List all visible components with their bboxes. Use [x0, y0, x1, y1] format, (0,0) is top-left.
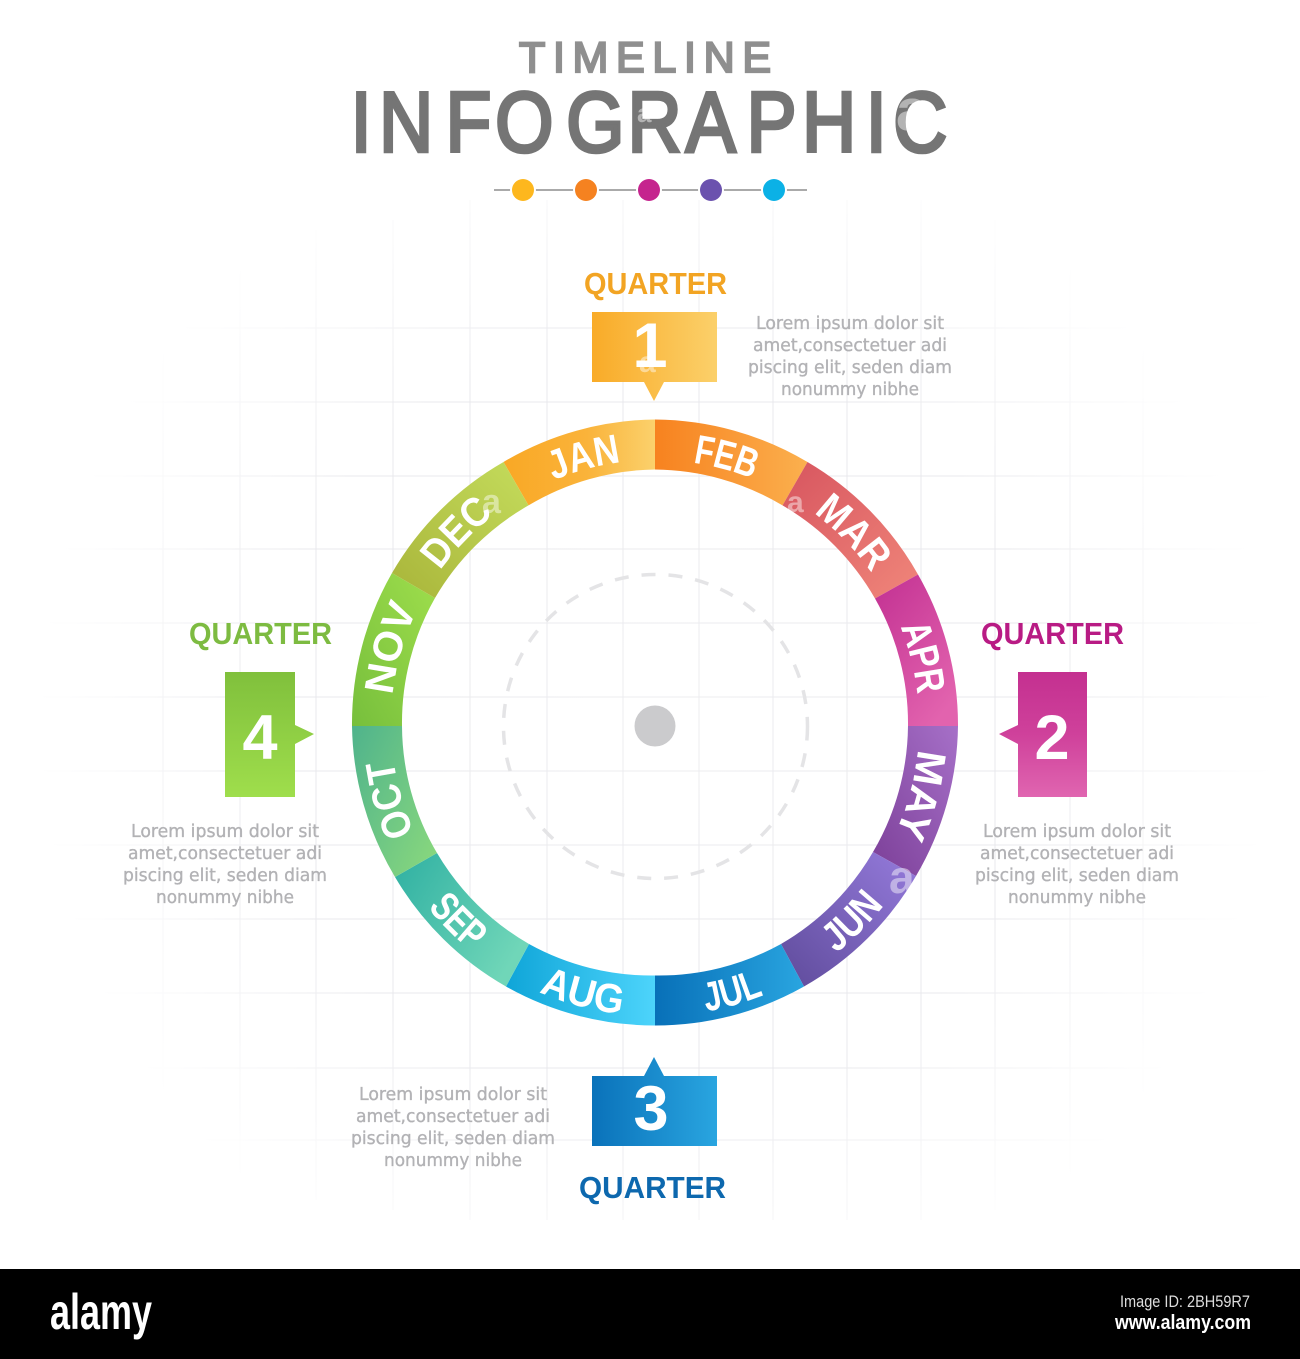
segment: DEC: [392, 462, 528, 598]
text block 2: [975, 822, 1179, 908]
panel: quarter 4: [123, 617, 332, 908]
segment: OCT: [352, 726, 437, 877]
watermark fragments: a: [482, 483, 502, 521]
number 3: 3: [633, 1074, 669, 1144]
title dots divider: [494, 177, 807, 203]
text block 3: piscing elit, seden diam: [351, 1129, 555, 1149]
segment: JUN: [781, 852, 916, 986]
segment: SEP: [395, 853, 529, 986]
label: MAR: MAR: [816, 492, 890, 572]
text block 1: amet,consectetuer adi: [753, 336, 947, 356]
segment: MAY: [873, 726, 958, 876]
text block 1: nonummy nibhe: [781, 380, 919, 400]
text block 3: amet,consectetuer adi: [356, 1107, 550, 1127]
text block 1: piscing elit, seden diam: [748, 358, 952, 378]
panel: quarter 2: [975, 617, 1179, 908]
text block 2: piscing elit, seden diam: [975, 866, 1179, 886]
callout box 3: [592, 1057, 717, 1146]
label: SEP: SEP: [431, 893, 486, 942]
segment: AUG: [506, 944, 655, 1026]
label: AUG: AUG: [540, 970, 622, 1013]
footer bar: [0, 1269, 1300, 1359]
label: FEB: FEB: [695, 435, 758, 476]
footer logo: alamy: [50, 1284, 152, 1340]
title line: INFOGRAPHIC: INFOGRAPHIC: [351, 75, 947, 170]
watermark fragments: a: [642, 1136, 659, 1169]
text block 4: [123, 822, 327, 908]
title line: TIMELINE: TIMELINE: [519, 34, 771, 82]
text block 4: amet,consectetuer adi: [128, 844, 322, 864]
number 2: 2: [1034, 703, 1070, 773]
heading: quarter 2: QUARTER: [981, 617, 1124, 651]
number 1: 1: [632, 311, 668, 381]
callout box 4: [225, 672, 314, 797]
text block 4: piscing elit, seden diam: [123, 866, 327, 886]
label: JUL: JUL: [705, 973, 763, 1011]
text block 2: Lorem ipsum dolor sit: [983, 822, 1171, 842]
footer url: www.alamy.com: [1114, 1312, 1251, 1334]
heading: quarter 1: QUARTER: [584, 267, 727, 301]
label: JAN: JAN: [550, 434, 619, 478]
segment: MAR: [782, 462, 918, 598]
month ring: [352, 420, 958, 1026]
heading: quarter 4: QUARTER: [189, 617, 332, 651]
segment: JAN: [504, 420, 655, 505]
text block 3: Lorem ipsum dolor sit: [359, 1085, 547, 1105]
text block 4: Lorem ipsum dolor sit: [131, 822, 319, 842]
text block 2: amet,consectetuer adi: [980, 844, 1174, 864]
title: [351, 34, 947, 170]
text block 3: [351, 1085, 555, 1171]
centre dashed circle: [504, 574, 808, 878]
panel: quarter 1: [584, 267, 952, 401]
watermark fragments: a: [637, 98, 652, 128]
segment: APR: [875, 574, 958, 726]
label: MAY: MAY: [899, 752, 946, 844]
label: JUN: JUN: [824, 888, 883, 950]
segment: NOV: [352, 573, 435, 726]
heading: quarter 3: QUARTER: [579, 1171, 726, 1205]
text block 1: Lorem ipsum dolor sit: [756, 314, 944, 334]
text block 3: nonummy nibhe: [384, 1151, 522, 1171]
text block 1: [748, 314, 952, 400]
label: APR: APR: [900, 626, 944, 694]
segment: FEB: [655, 420, 808, 505]
watermark fragments: [482, 78, 929, 1169]
callout box 1: [592, 312, 717, 401]
panel: quarter 3: [351, 1057, 726, 1205]
callout box 2: [999, 672, 1087, 797]
label: DEC: DEC: [419, 498, 490, 568]
text block 4: nonummy nibhe: [156, 888, 294, 908]
label: OCT: OCT: [366, 764, 410, 838]
watermark fragments: a: [896, 78, 929, 143]
watermark fragments: a: [787, 486, 804, 519]
segment: JUL: [655, 944, 804, 1026]
centre dot: [634, 706, 676, 746]
watermark fragments: a: [639, 346, 656, 379]
watermark fragments: a: [889, 851, 915, 903]
text block 2: nonummy nibhe: [1008, 888, 1146, 908]
image id: Image ID: 2BH59R7: [1120, 1292, 1250, 1311]
number 4: 4: [242, 703, 278, 773]
label: NOV: NOV: [364, 598, 413, 692]
